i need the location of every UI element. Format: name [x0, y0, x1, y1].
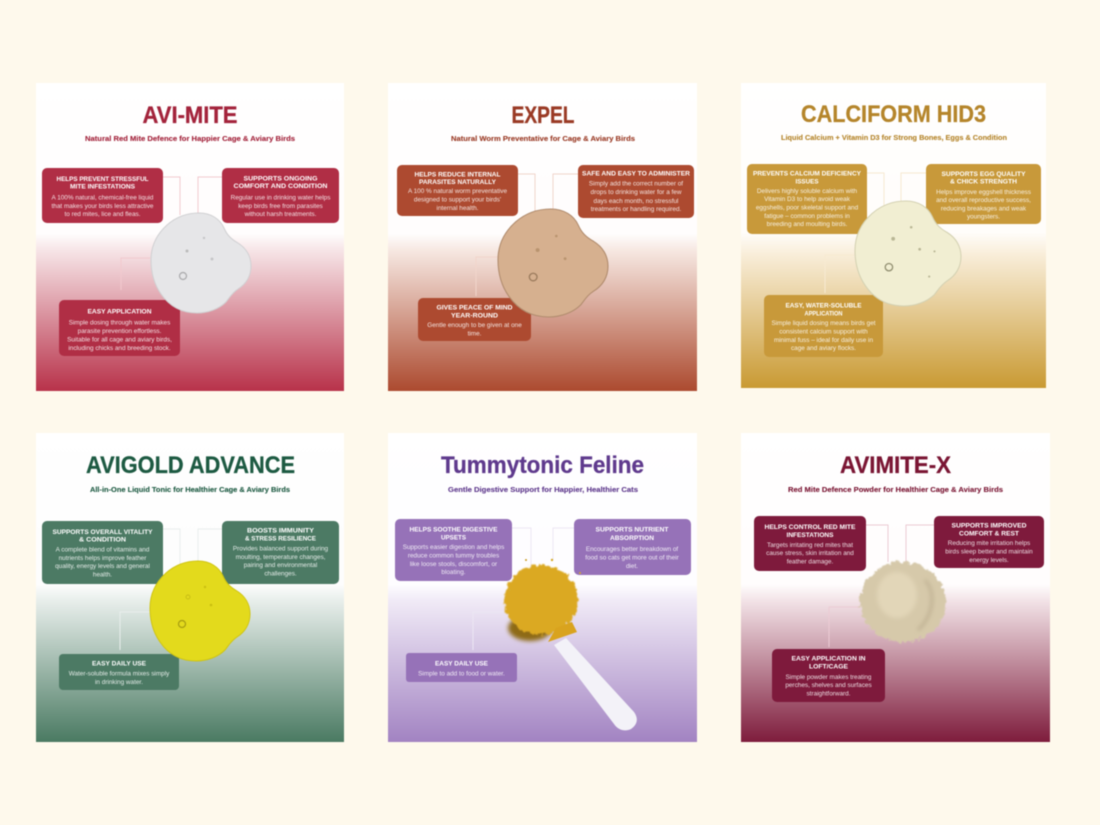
card: easy water-soluble application: EASY, WATER-SOLUBLE	[786, 303, 862, 310]
card: supports overall vitality and condition	[42, 521, 163, 584]
card: easy application in loft/cage: EASY APPLICATION IN	[792, 656, 866, 663]
card: supports egg quality and chick strength: youngsters.	[967, 214, 1000, 220]
subtitle: Liquid Calcium + Vitamin D3 for Strong Bones, Eggs & Condition	[781, 135, 1007, 142]
card: helps control red mite infestations	[754, 516, 866, 571]
card: safe and easy to administer: SAFE AND EASY TO ADMINISTER	[582, 170, 690, 177]
card: easy application: including chicks and breeding stock.	[68, 345, 171, 352]
card: boosts immunity and stress resilience: BOOSTS IMMUNITY	[247, 528, 315, 535]
card: supports improved comfort and rest: energy levels.	[969, 557, 1009, 564]
card: supports overall vitality and condition: SUPPORTS OVERALL VITALITY	[52, 529, 153, 536]
card: supports egg quality and chick strength: & CHICK STRENGTH	[950, 179, 1017, 186]
card: supports ongoing comfort and condition: Regular use in drinking water helps	[231, 194, 330, 202]
card: supports ongoing comfort and condition: keep birds free from parasites	[238, 203, 323, 210]
card: easy application in loft/cage: straightforward.	[806, 690, 851, 698]
card: prevents calcium deficiency issues: Delivers highly soluble calcium with	[757, 188, 858, 195]
card: helps soothe digestive upsets: Supports easier digestion and helps	[403, 544, 504, 551]
panel: CALCIFORM HID3	[741, 83, 1046, 388]
card: helps control red mite infestations: cause stress, skin irritation and	[766, 550, 854, 557]
card: helps soothe digestive upsets: reduce common tummy troubles	[408, 552, 499, 560]
card: supports ongoing comfort and condition: SUPPORTS ONGOING	[244, 175, 318, 182]
card: easy daily use	[406, 653, 517, 682]
card: helps prevent stressful mite infestations	[42, 168, 163, 223]
card: safe and easy to administer: days each month, no stressful	[594, 198, 678, 205]
card: easy water-soluble application: consistent calcium support with	[779, 328, 868, 336]
icon: yellow liquid drop	[150, 561, 250, 661]
card: supports nutrient absorption: diet.	[626, 563, 638, 570]
card: helps reduce internal parasites naturally: HELPS REDUCE INTERNAL	[414, 171, 500, 178]
card: easy application: EASY APPLICATION	[88, 308, 152, 315]
card: easy application in loft/cage: Simple powder makes treating	[786, 674, 872, 681]
yellow powder mound	[504, 565, 578, 635]
panel: Tummytonic Feline	[388, 433, 697, 742]
icon: beige powder mound	[860, 562, 946, 642]
card: supports overall vitality and condition: nutrients helps improve feather	[59, 555, 147, 562]
icon: clear liquid drop	[151, 213, 251, 313]
card: easy daily use: EASY DAILY USE	[435, 660, 489, 667]
card: prevents calcium deficiency issues	[747, 164, 867, 234]
card: easy water-soluble application: Simple liquid dosing means birds get	[771, 320, 876, 327]
card: safe and easy to administer: treatments or handling required.	[591, 206, 682, 213]
card: gives peace of mind year-round: Gentle enough to be given at one	[427, 322, 522, 329]
card: helps prevent stressful mite infestations: HELPS PREVENT STRESSFUL	[56, 176, 148, 183]
card: supports overall vitality and condition: health.	[93, 572, 112, 578]
card: easy water-soluble application: minimal fuss – ideal for daily use in	[774, 337, 873, 344]
card: easy application in loft/cage: perches, shelves and surfaces	[785, 682, 872, 689]
card: helps reduce internal parasites naturally: designed to support your birds'	[414, 196, 501, 204]
card: easy application in loft/cage	[772, 649, 885, 702]
card: easy application: parasite prevention effortless.	[78, 328, 162, 335]
scoop handle	[554, 638, 637, 730]
subtitle: Natural Red Mite Defence for Happier Cage & Aviary Birds	[85, 136, 295, 143]
card: helps control red mite infestations: HELPS CONTROL RED MITE	[764, 524, 856, 531]
card: helps prevent stressful mite infestations: MITE INFESTATIONS	[70, 183, 136, 190]
icon: tan liquid drop	[498, 209, 608, 317]
card: helps prevent stressful mite infestations: that makes your birds less attractive	[52, 203, 154, 210]
subtitle: All-in-One Liquid Tonic for Healthier Cage & Aviary Birds	[90, 487, 290, 494]
card: easy water-soluble application: APPLICATION	[804, 310, 843, 317]
card: gives peace of mind year-round: time.	[468, 330, 482, 338]
card: prevents calcium deficiency issues: fatigue – common problems in	[764, 213, 850, 220]
card: gives peace of mind year-round	[418, 298, 531, 341]
card: helps soothe digestive upsets: HELPS SOOTHE DIGESTIVE	[410, 527, 498, 534]
card: safe and easy to administer	[578, 165, 694, 218]
card: boosts immunity and stress resilience: Provides balanced support during	[233, 546, 329, 552]
card: supports overall vitality and condition: A complete blend of vitamins and	[56, 546, 150, 554]
card: helps prevent stressful mite infestations: A 100% natural, chemical-free liquid	[52, 194, 154, 202]
card: prevents calcium deficiency issues: Vitamin D3 to help avoid weak	[764, 196, 851, 203]
card: supports egg quality and chick strength: Helps improve eggshell thickness	[936, 189, 1031, 196]
card: easy application in loft/cage: LOFT/CAGE	[809, 663, 849, 670]
card: supports egg quality and chick strength: reducing breakages and weak	[941, 206, 1027, 212]
panel: AVI-MITE	[36, 83, 344, 391]
card: supports egg quality and chick strength: SUPPORTS EGG QUALITY	[942, 171, 1026, 178]
card: boosts immunity and stress resilience	[222, 521, 339, 584]
subtitle: Red Mite Defence Powder for Healthier Cage & Aviary Birds	[788, 487, 1003, 494]
card: easy application: Suitable for all cage and aviary birds,	[67, 336, 172, 343]
card: boosts immunity and stress resilience: moulting, temperature changes,	[236, 554, 326, 561]
card: helps soothe digestive upsets	[395, 519, 512, 581]
card: supports nutrient absorption	[574, 519, 691, 575]
card: supports nutrient absorption: Encourages better breakdown of	[586, 546, 678, 553]
card: helps reduce internal parasites naturally: PARASITES NATURALLY	[419, 179, 497, 186]
card: supports nutrient absorption: food so cats get more out of their	[585, 554, 680, 562]
card: supports improved comfort and rest	[934, 516, 1044, 568]
card: easy daily use: Water-soluble formula mixes simply	[69, 670, 170, 678]
card: helps control red mite infestations: feather damage.	[787, 558, 833, 566]
card: safe and easy to administer: drops to drinking water for a few	[591, 189, 682, 196]
panel: AVIMITE-X	[741, 433, 1050, 742]
title: Tummytonic Feline	[441, 452, 644, 479]
card: supports improved comfort and rest: Reducing mite irritation helps	[948, 540, 1030, 547]
card: boosts immunity and stress resilience: challenges.	[264, 570, 297, 578]
card: gives peace of mind year-round: GIVES PEACE OF MIND	[436, 305, 513, 312]
title: CALCIFORM HID3	[801, 101, 986, 128]
card: supports overall vitality and condition: & CONDITION	[79, 537, 126, 544]
card: helps soothe digestive upsets: bloating.	[441, 569, 466, 576]
title: AVIGOLD ADVANCE	[86, 452, 295, 479]
card: supports ongoing comfort and condition: without harsh treatments.	[244, 211, 317, 218]
card: supports nutrient absorption: SUPPORTS NUTRIENT	[596, 527, 668, 534]
card: supports improved comfort and rest: SUPPORTS IMPROVED	[952, 522, 1027, 529]
card: easy daily use	[59, 654, 179, 690]
card: supports egg quality and chick strength	[926, 164, 1041, 224]
title: AVI-MITE	[142, 102, 238, 129]
card: easy water-soluble application	[764, 295, 883, 357]
card: boosts immunity and stress resilience: pairing and environmental	[244, 562, 317, 569]
title: EXPEL	[512, 102, 575, 129]
card: gives peace of mind year-round: YEAR-ROUND	[451, 312, 498, 319]
icon: pale yellow liquid drop	[855, 201, 961, 306]
card: easy daily use: in drinking water.	[95, 679, 143, 686]
panel: EXPEL	[388, 83, 697, 391]
card: supports improved comfort and rest: COMFORT & REST	[959, 530, 1019, 537]
card: easy water-soluble application: cage and aviary flocks.	[791, 345, 856, 352]
card: safe and easy to administer: Simply add the correct number of	[589, 180, 683, 188]
card: supports nutrient absorption: ABSORPTION	[610, 535, 654, 542]
card: helps control red mite infestations: INFESTATIONS	[786, 532, 834, 539]
card: helps soothe digestive upsets: UPSETS	[441, 534, 467, 541]
card: supports improved comfort and rest: birds sleep better and maintain	[945, 548, 1033, 556]
card: supports ongoing comfort and condition: COMFORT AND CONDITION	[234, 183, 328, 190]
card: supports overall vitality and condition: quality, energy levels and general	[55, 563, 150, 570]
card: easy daily use: EASY DAILY USE	[92, 661, 147, 668]
card: boosts immunity and stress resilience: & STRESS RESILIENCE	[245, 536, 317, 543]
icon: scoop with yellow powder	[504, 559, 637, 730]
card: supports ongoing comfort and condition	[222, 168, 339, 223]
card: helps reduce internal parasites naturally	[397, 165, 518, 216]
card: easy application	[59, 300, 180, 356]
card: helps soothe digestive upsets: like loose stools, discomfort, or	[410, 561, 498, 568]
panel: AVIGOLD ADVANCE	[36, 433, 344, 742]
card: prevents calcium deficiency issues: PREVENTS CALCIUM DEFICIENCY	[753, 171, 862, 178]
subtitle: Natural Worm Preventative for Cage & Aviary Birds	[451, 136, 635, 143]
title: AVIMITE-X	[840, 452, 952, 479]
card: helps control red mite infestations: Targets irritating red mites that	[767, 542, 853, 549]
card: helps reduce internal parasites naturally: internal health.	[437, 205, 479, 212]
card: easy application: Simple dosing through water makes	[69, 320, 170, 326]
card: easy daily use: Simple to add to food or water.	[418, 670, 505, 678]
card: helps reduce internal parasites naturally: A 100 % natural worm preventative	[408, 188, 507, 195]
card: prevents calcium deficiency issues: eggshells, poor skeletal support and	[756, 204, 859, 212]
subtitle: Gentle Digestive Support for Happier, Healthier Cats	[448, 487, 638, 494]
card: supports egg quality and chick strength: and overall reproductive success,	[936, 197, 1031, 204]
card: helps prevent stressful mite infestations: to red mites, lice and fleas.	[64, 211, 141, 218]
card: prevents calcium deficiency issues: breeding and moulting birds.	[767, 221, 848, 228]
card: prevents calcium deficiency issues: ISSUES	[796, 178, 819, 185]
